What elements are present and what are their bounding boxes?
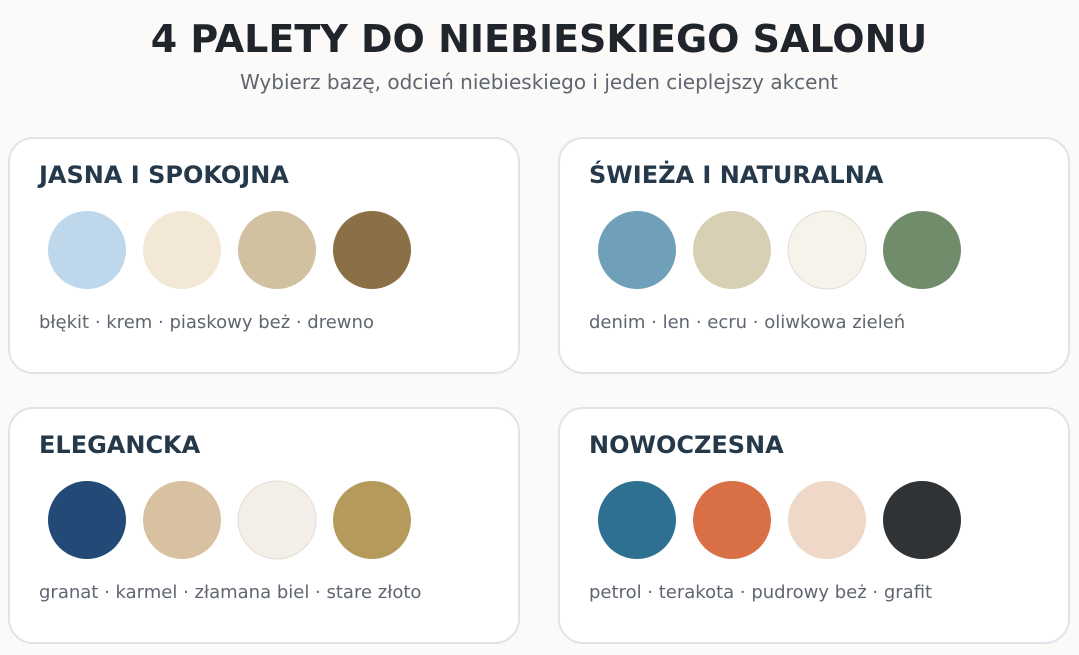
caption: elegancka: granat · karmel · złamana biel · stare złoto	[39, 582, 421, 603]
heading: jasna i spokojna: JASNA I SPOKOJNA	[37, 161, 289, 189]
swatch: oliwkowa zieleń	[883, 211, 961, 289]
subtitle: Wybierz bazę, odcień niebieskiego i jeden cieplejszy akcent	[240, 70, 838, 94]
swatch: denim	[598, 211, 676, 289]
caption: jasna i spokojna: błękit · krem · piaskowy beż · drewno	[39, 312, 374, 333]
title: 4 PALETY DO NIEBIESKIEGO SALONU	[151, 17, 927, 61]
heading: nowoczesna: NOWOCZESNA	[589, 431, 784, 459]
panel: jasna i spokojna	[9, 138, 519, 373]
swatch: błękit	[48, 211, 126, 289]
swatch: granat	[48, 481, 126, 559]
swatch: piaskowy beż	[238, 211, 316, 289]
caption: nowoczesna: petrol · terakota · pudrowy beż · grafit	[589, 582, 932, 603]
swatch: ecru	[788, 211, 866, 289]
caption: świeża i naturalna: denim · len · ecru · oliwkowa zieleń	[589, 312, 905, 333]
swatch: stare złoto	[333, 481, 411, 559]
swatch: terakota	[693, 481, 771, 559]
swatch: złamana biel	[238, 481, 316, 559]
panel: elegancka	[9, 408, 519, 643]
panel: świeża i naturalna	[559, 138, 1069, 373]
swatch: pudrowy beż	[788, 481, 866, 559]
swatch: petrol	[598, 481, 676, 559]
heading: świeża i naturalna: ŚWIEŻA I NATURALNA	[589, 159, 884, 189]
swatch: grafit	[883, 481, 961, 559]
swatch: karmel	[143, 481, 221, 559]
panel: nowoczesna	[559, 408, 1069, 643]
heading: elegancka: ELEGANCKA	[39, 431, 201, 459]
swatch: len	[693, 211, 771, 289]
swatch: krem	[143, 211, 221, 289]
swatch: drewno	[333, 211, 411, 289]
